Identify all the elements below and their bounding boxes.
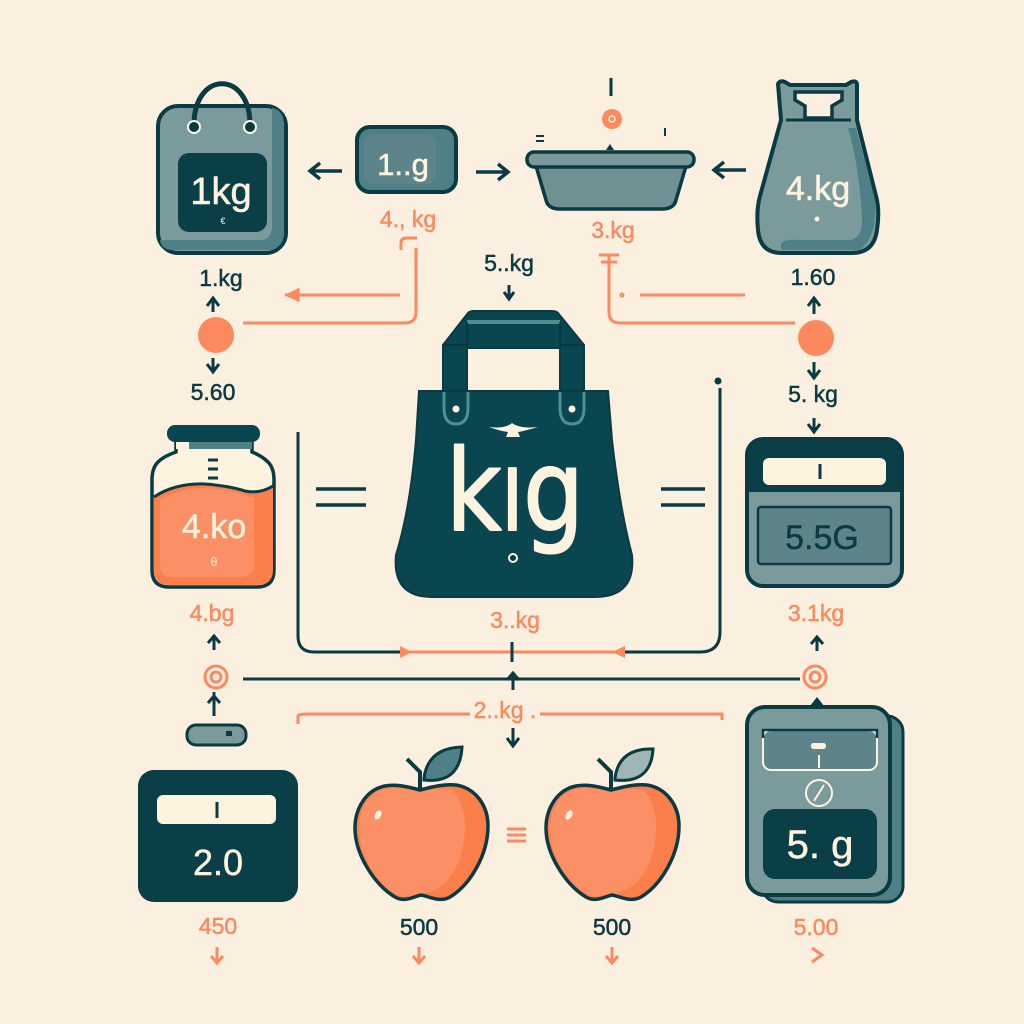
icon: apple right: [546, 749, 679, 899]
icon: 1kg shopping bag: €: [220, 216, 226, 226]
icon: scale 2.0: [138, 770, 298, 902]
node: right upper: [798, 298, 834, 378]
icon: jar: θ: [211, 555, 218, 569]
labels: top row: 1.kg: [199, 265, 243, 291]
icon: tray: [527, 128, 694, 209]
icon: 1kg shopping bag: 1kg: [190, 171, 252, 213]
labels: top row: 3..kg: [490, 607, 540, 633]
icon: 4kg sack: 4.kg: [786, 170, 850, 208]
icon: top marker: [602, 78, 622, 129]
icon: scale 2.0: 2.0: [193, 842, 243, 883]
labels: bottom row: 500: [400, 914, 438, 940]
labels: top row: 1.60: [791, 264, 835, 290]
icon: small scale 1..g: [357, 127, 456, 192]
icon: jar: 4.ko: [182, 508, 246, 546]
icon: right scale 5.5G: 5.5G: [785, 519, 859, 557]
connector lines: middle: [243, 378, 800, 724]
labels: top row: 5.60: [191, 379, 235, 405]
labels: top row: 2..kg .: [474, 697, 536, 723]
labels: bottom row: [199, 913, 838, 940]
connector lines: upper: [243, 238, 795, 323]
labels: top row: 3.1kg: [788, 600, 844, 626]
icon: 1kg shopping bag: [158, 84, 286, 253]
labels: top row: 5..kg: [484, 250, 534, 276]
labels: top row: 4.bg: [190, 600, 234, 626]
icon: pill: [187, 725, 246, 745]
node: left upper: [198, 298, 234, 372]
icon: apple left: [355, 747, 488, 899]
icon: scale 5.g: 5. g: [787, 823, 853, 867]
icon: central bag: [396, 311, 632, 597]
equals: between apples: [507, 829, 526, 841]
icon: jar: [152, 425, 274, 587]
equals signs: [316, 489, 705, 505]
labels: bottom row: 5.00: [794, 914, 838, 940]
labels: top row: 4., kg: [380, 206, 436, 232]
labels: top row: 5. kg: [788, 381, 838, 407]
icon: scale 5.g: [747, 697, 903, 902]
small arrows and nodes: lower: [205, 285, 826, 746]
labels: bottom row: 500: [593, 914, 631, 940]
labels: top row: 3.kg: [591, 217, 635, 243]
icon: 4kg sack: [757, 81, 878, 253]
arrows: top row: [310, 162, 746, 180]
icon: right scale 5.5G: [747, 439, 902, 586]
icon: central bag: kIg: [446, 427, 584, 557]
labels: bottom row: 450: [199, 913, 237, 939]
icon: small scale 1..g: 1..g: [377, 147, 429, 182]
arrows: bottom row: [211, 947, 822, 963]
labels: top row: [190, 206, 844, 723]
